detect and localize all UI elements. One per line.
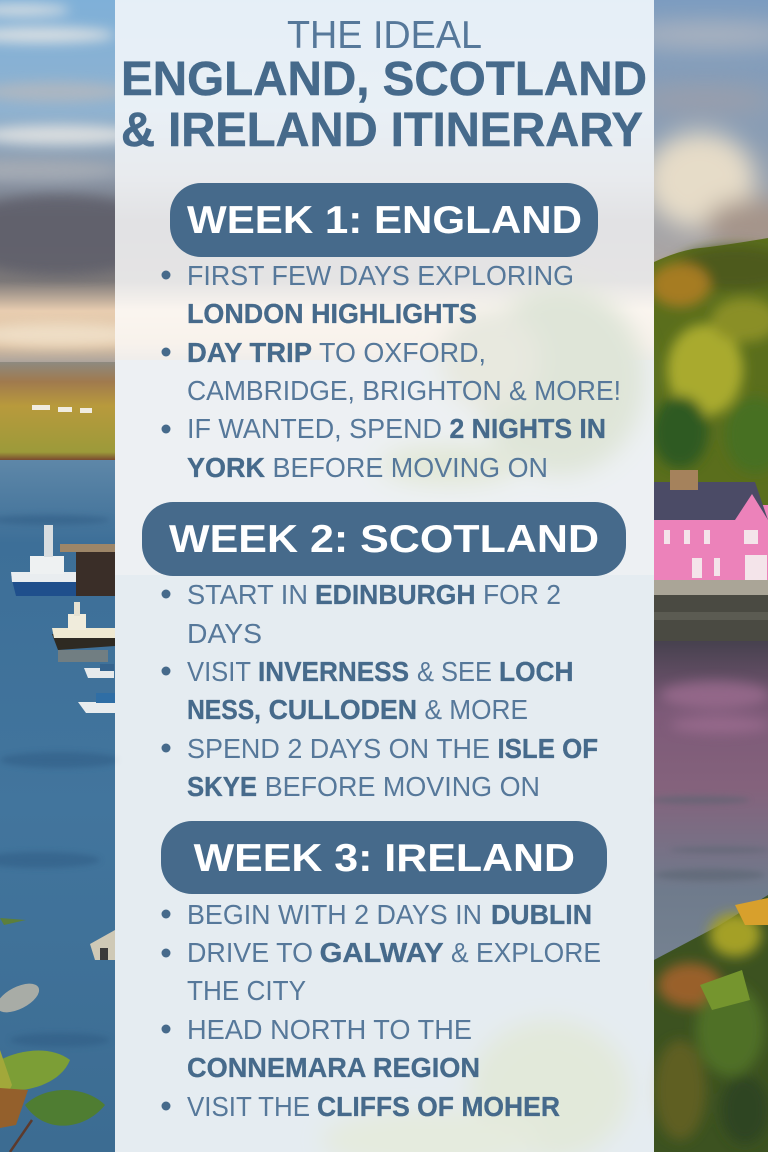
sky: [0, 0, 654, 362]
week 1 bullet list: YORK: [187, 452, 265, 483]
fishing boat: [11, 525, 115, 596]
week 1 bullet list: FIRST FEW DAYS EXPLORING: [187, 260, 574, 291]
week 3 heading pill: WEEK 3: IRELAND: [194, 837, 575, 880]
week 2 bullet list: START IN: [187, 579, 308, 610]
week 2 bullet list: CULLODEN: [269, 694, 417, 725]
white boat: [52, 602, 115, 662]
quay wall: [654, 580, 768, 641]
week 3 bullet list: HEAD NORTH TO THE: [187, 1014, 472, 1045]
small boat: [84, 664, 114, 678]
week 3 bullet list: DUBLIN: [491, 899, 592, 930]
small boat blue canopy: [78, 693, 115, 713]
week 3 bullet list: BEGIN WITH 2 DAYS IN: [187, 899, 482, 930]
distant houses: [32, 405, 92, 413]
week 2 bullet list: SPEND 2 DAYS ON THE: [187, 733, 490, 764]
week 3 bullet list: GALWAY: [320, 937, 444, 968]
week 2 heading pill: [142, 502, 626, 576]
leaves bottom left: [0, 918, 105, 1152]
week 2 bullet list: LOCH: [499, 656, 574, 687]
week 2 bullet list: ISLE OF: [498, 733, 598, 764]
water left: [0, 460, 115, 1152]
week 1 heading pill: WEEK 1: ENGLAND: [187, 199, 582, 242]
water mid panel: [115, 575, 654, 1152]
dinghy: [90, 930, 115, 960]
vegetation bottom right: [320, 895, 768, 1152]
pale shoreline behind panel: [115, 360, 654, 575]
clouds left: [0, 0, 115, 352]
week 2 bullet list: BEFORE MOVING ON: [265, 771, 540, 802]
week 2 bullet list: VISIT: [187, 656, 251, 687]
week 3 bullet list: VISIT THE: [187, 1091, 310, 1122]
title line: england, scotland: ENGLAND, SCOTLAND: [121, 53, 647, 106]
week 1 bullet list: BEFORE MOVING ON: [272, 452, 548, 483]
week 2 bullet list: [162, 579, 598, 802]
week 3 bullet list: & EXPLORE: [451, 937, 601, 968]
title: [121, 14, 647, 157]
week 1 heading pill: [170, 183, 598, 257]
week 2 bullet list: & MORE: [424, 694, 528, 725]
week 1 bullet list: LONDON HIGHLIGHTS: [187, 298, 477, 329]
pink reflection: [660, 681, 768, 733]
translucent text panel: [115, 0, 654, 1152]
week 3 bullet list: CLIFFS OF MOHER: [317, 1091, 560, 1122]
hills and shore left: [0, 362, 115, 460]
week 1 bullet list: IF WANTED, SPEND: [187, 413, 442, 444]
rowing dinghy: [0, 984, 40, 1012]
week 3 bullet list: DRIVE TO: [187, 937, 313, 968]
week 1 bullet list: 2 NIGHTS IN: [450, 413, 606, 444]
week 2 bullet list: & SEE: [417, 656, 492, 687]
week 2 bullet list: DAYS: [187, 618, 262, 649]
week 2 bullet list: NESS,: [187, 694, 261, 725]
week 2 bullet list: FOR 2: [483, 579, 561, 610]
week 3 bullet list: [162, 899, 601, 1122]
title line: ireland itinerary: & IRELAND ITINERARY: [121, 104, 643, 157]
week 2 bullet list: SKYE: [187, 771, 257, 802]
clouds right: [654, 12, 768, 244]
pink building: [654, 470, 768, 581]
tree masses: [380, 238, 768, 525]
week 1 bullet list: TO OXFORD,: [319, 337, 486, 368]
week 2 bullet list: EDINBURGH: [315, 579, 476, 610]
week 2 bullet list: INVERNESS: [258, 656, 409, 687]
right sky: [654, 0, 768, 262]
title line: the ideal: THE IDEAL: [287, 14, 482, 57]
week 1 bullet list: [162, 260, 621, 483]
week 2 heading pill: WEEK 2: SCOTLAND: [169, 518, 599, 561]
week 3 bullet list: THE CITY: [187, 975, 306, 1006]
ripples left: [0, 515, 120, 1047]
water right: [654, 641, 768, 960]
ripples right: [650, 796, 768, 881]
week 3 bullet list: CONNEMARA REGION: [187, 1052, 480, 1083]
week 1 bullet list: DAY TRIP: [187, 337, 312, 368]
week 3 heading pill: [161, 821, 607, 894]
week 1 bullet list: CAMBRIDGE, BRIGHTON & MORE!: [187, 375, 621, 406]
